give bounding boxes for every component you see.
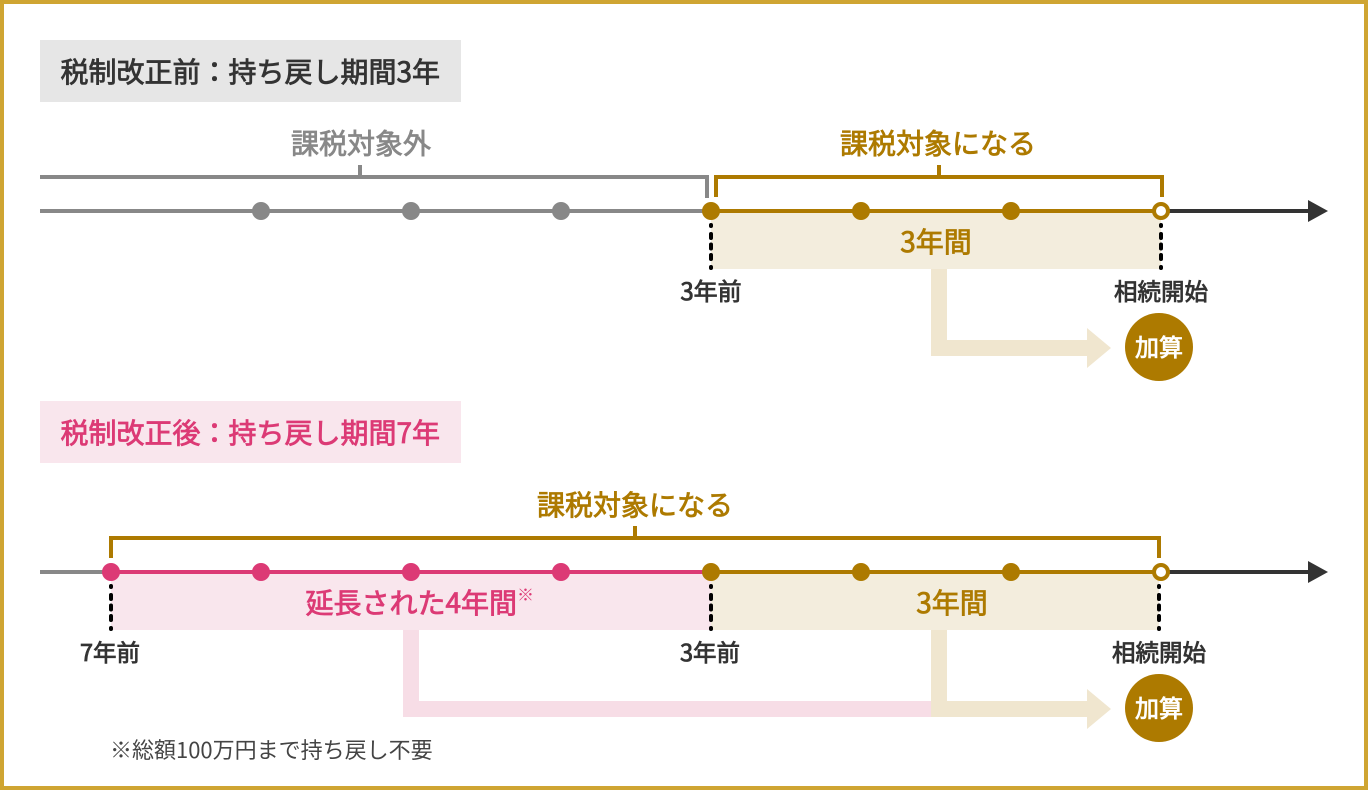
bracket: not taxable [40, 122, 707, 198]
bracket: taxable [111, 484, 1159, 558]
badge: add-back [1125, 674, 1193, 742]
panel: before reform [40, 40, 1328, 381]
label: 7 years before: 7年前 [80, 634, 140, 668]
footnote: ※総額100万円まで持ち戻し不要 [110, 733, 433, 765]
label: 3 years before: 3年前 [680, 634, 740, 668]
band: 3 years: 3年間 [900, 221, 972, 261]
band: 3 years [711, 211, 1161, 269]
bracket: taxable: 課税対象になる [840, 122, 1036, 162]
badge: add-back: 加算 [1135, 328, 1183, 363]
label: 3 years before: 3年前 [680, 272, 742, 307]
panel: after reform [40, 401, 1328, 765]
bracket: not taxable: 課税対象外 [291, 122, 431, 162]
band: 3 years [711, 572, 1159, 630]
badge: add-back: 加算 [1135, 689, 1183, 724]
label: inheritance start: 相続開始 [1112, 634, 1206, 668]
heading: after reform [40, 401, 461, 463]
band: extended 4 years [111, 572, 711, 630]
arrow: add-back [931, 630, 1111, 729]
heading: after reform: 税制改正後：持ち戻し期間7年 [60, 412, 440, 452]
badge: add-back [1125, 313, 1193, 381]
bracket: taxable [716, 122, 1162, 197]
band: 3 years: 3年間 [916, 582, 988, 622]
heading: before reform: 税制改正前：持ち戻し期間3年 [60, 51, 440, 91]
bracket: taxable: 課税対象になる [537, 484, 733, 524]
connector: extended period [403, 630, 931, 717]
band: extended 4 years: 延長された4年間 [306, 582, 517, 622]
band: extended 4 years: ※ [517, 581, 534, 606]
label: inheritance start: 相続開始 [1114, 273, 1208, 307]
timeline [40, 561, 1328, 629]
arrow: add-back [931, 269, 1111, 368]
timeline [40, 200, 1328, 268]
heading: before reform [40, 40, 461, 102]
